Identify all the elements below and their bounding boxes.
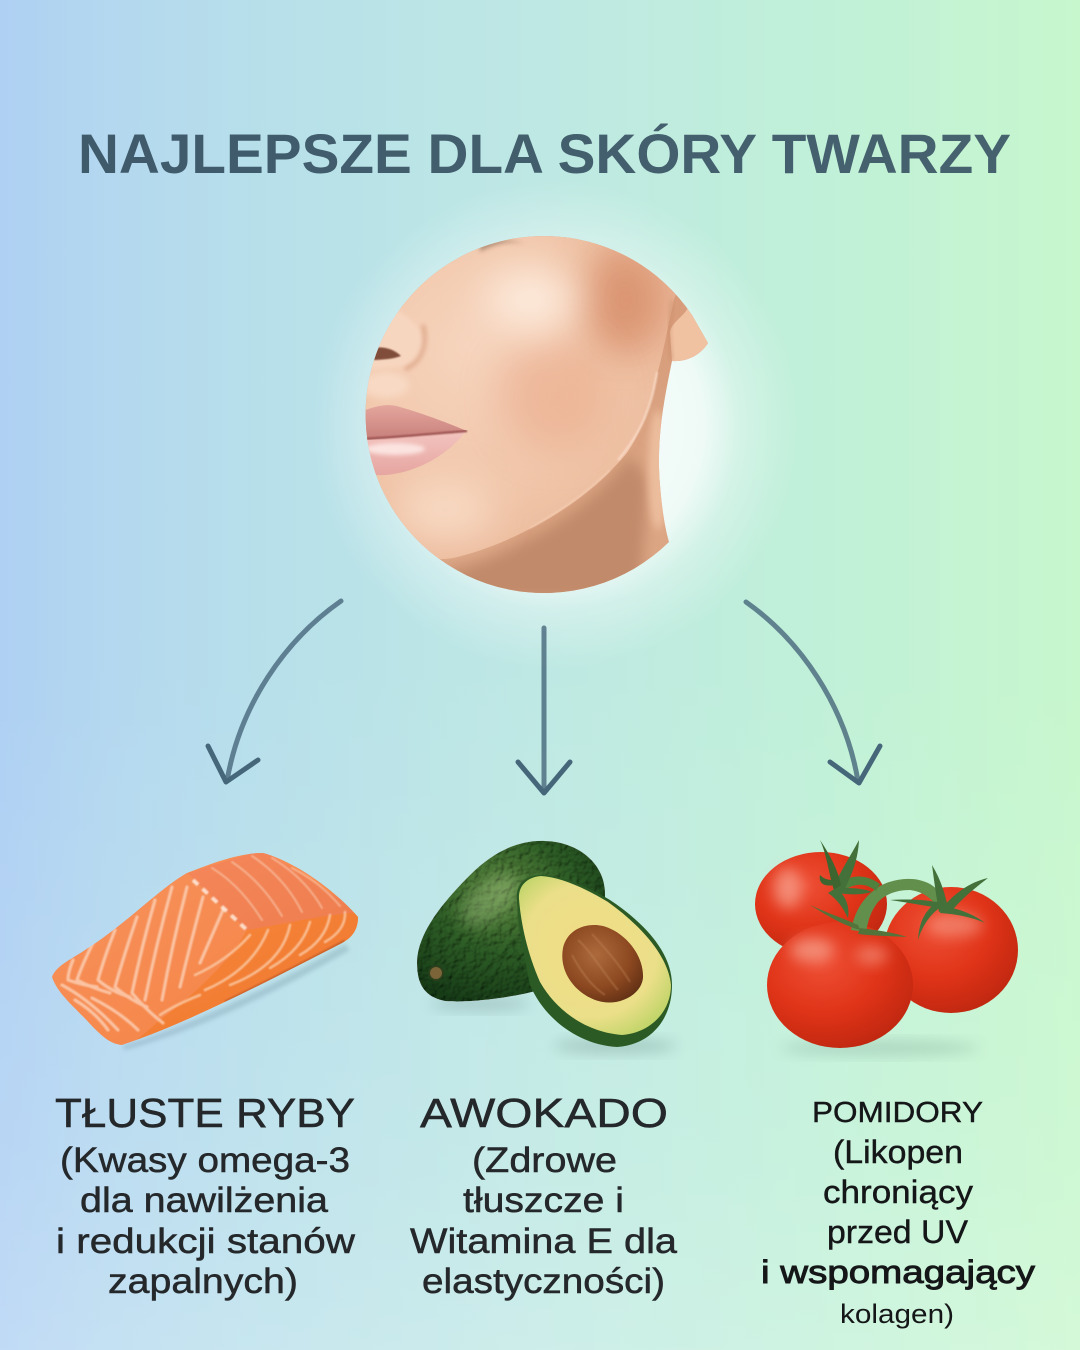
front tomato: [767, 922, 913, 1048]
salmon fat lines on main side: [62, 887, 223, 1030]
icon: tomatoes: [755, 840, 1018, 1055]
tomato description: [823, 1134, 973, 1250]
lip line: [360, 431, 467, 439]
neck shading: [445, 455, 648, 600]
nostril: [374, 346, 402, 361]
upper lip: [360, 405, 467, 440]
tomato description: (Likopen: [833, 1134, 963, 1170]
avocado heading: AWOKADO: [420, 1090, 668, 1136]
whole avocado: [417, 841, 605, 1001]
fish description: [56, 1141, 356, 1301]
label: avocado: [410, 1090, 678, 1301]
face illustration: [366, 236, 708, 593]
salmon front cut: [136, 912, 358, 1040]
avocado shadow: [553, 1039, 677, 1053]
tomato description: przed UV: [827, 1214, 969, 1250]
label: fish: [55, 1090, 356, 1301]
ear shadow: [669, 300, 673, 360]
jaw under light: [530, 470, 610, 528]
lip highlight: [365, 443, 425, 455]
tomato shadow: [780, 1041, 980, 1055]
fish heading: TŁUSTE RYBY: [55, 1090, 355, 1136]
avocado description: elastyczności): [422, 1262, 665, 1301]
cheek and jaw: [366, 236, 676, 559]
arrow: to avocado: [518, 628, 570, 793]
salmon fat lines on top: [212, 856, 340, 920]
cheek blush: [583, 245, 667, 355]
avocado description: Witamina E dla: [410, 1222, 678, 1261]
fish description: i redukcji stanów: [56, 1222, 356, 1261]
nose edge shadow: [405, 325, 425, 369]
hair shadow: [480, 239, 525, 252]
tomato emphasis line: i wspomagający: [761, 1254, 1035, 1290]
tomato heading: POMIDORY: [812, 1097, 983, 1129]
jaw highlight: [618, 372, 657, 460]
glow behind face: [311, 180, 801, 670]
avocado description: [410, 1141, 678, 1301]
back tomato: [755, 852, 887, 956]
icon: avocado: [417, 841, 677, 1053]
salmon dark lower edge: [225, 941, 345, 1002]
pit streaks: [572, 934, 630, 995]
tomato description: chroniący: [823, 1174, 973, 1210]
cheek highlight: [484, 268, 576, 332]
avocado pit: [562, 925, 643, 1003]
salmon top back: [187, 850, 365, 930]
avocado description: (Zdrowe: [472, 1141, 617, 1180]
fish description: (Kwasy omega-3: [60, 1141, 350, 1180]
salmon fat arcs on cut: [160, 912, 345, 1015]
salmon shadow: [122, 944, 350, 1050]
arrow: to fish: [208, 601, 341, 782]
stems and sepals: [810, 840, 988, 940]
label: tomatoes: [761, 1097, 1035, 1329]
title: NAJLEPSZE DLA SKÓRY TWARZY: [78, 122, 1011, 185]
lower lip: [368, 433, 464, 475]
fish description: zapalnych): [108, 1262, 298, 1301]
arrow: to tomatoes: [746, 602, 880, 783]
fish description: dla nawilżenia: [80, 1181, 329, 1220]
avocado skin sheen: [452, 864, 528, 936]
ear: [670, 308, 708, 361]
avocado description: tłuszcze i: [463, 1181, 624, 1220]
philtrum light: [361, 372, 409, 398]
avocado half skin: [517, 875, 672, 1047]
salmon ridge: [193, 880, 247, 930]
neck light side: [648, 410, 668, 530]
nose: [372, 311, 420, 370]
icon: salmon fillet: [52, 853, 358, 1050]
right tomato: [884, 887, 1018, 1013]
avocado flesh: [519, 876, 671, 1035]
avocado stem end: [429, 966, 443, 980]
tomato final line: kolagen): [840, 1299, 954, 1329]
